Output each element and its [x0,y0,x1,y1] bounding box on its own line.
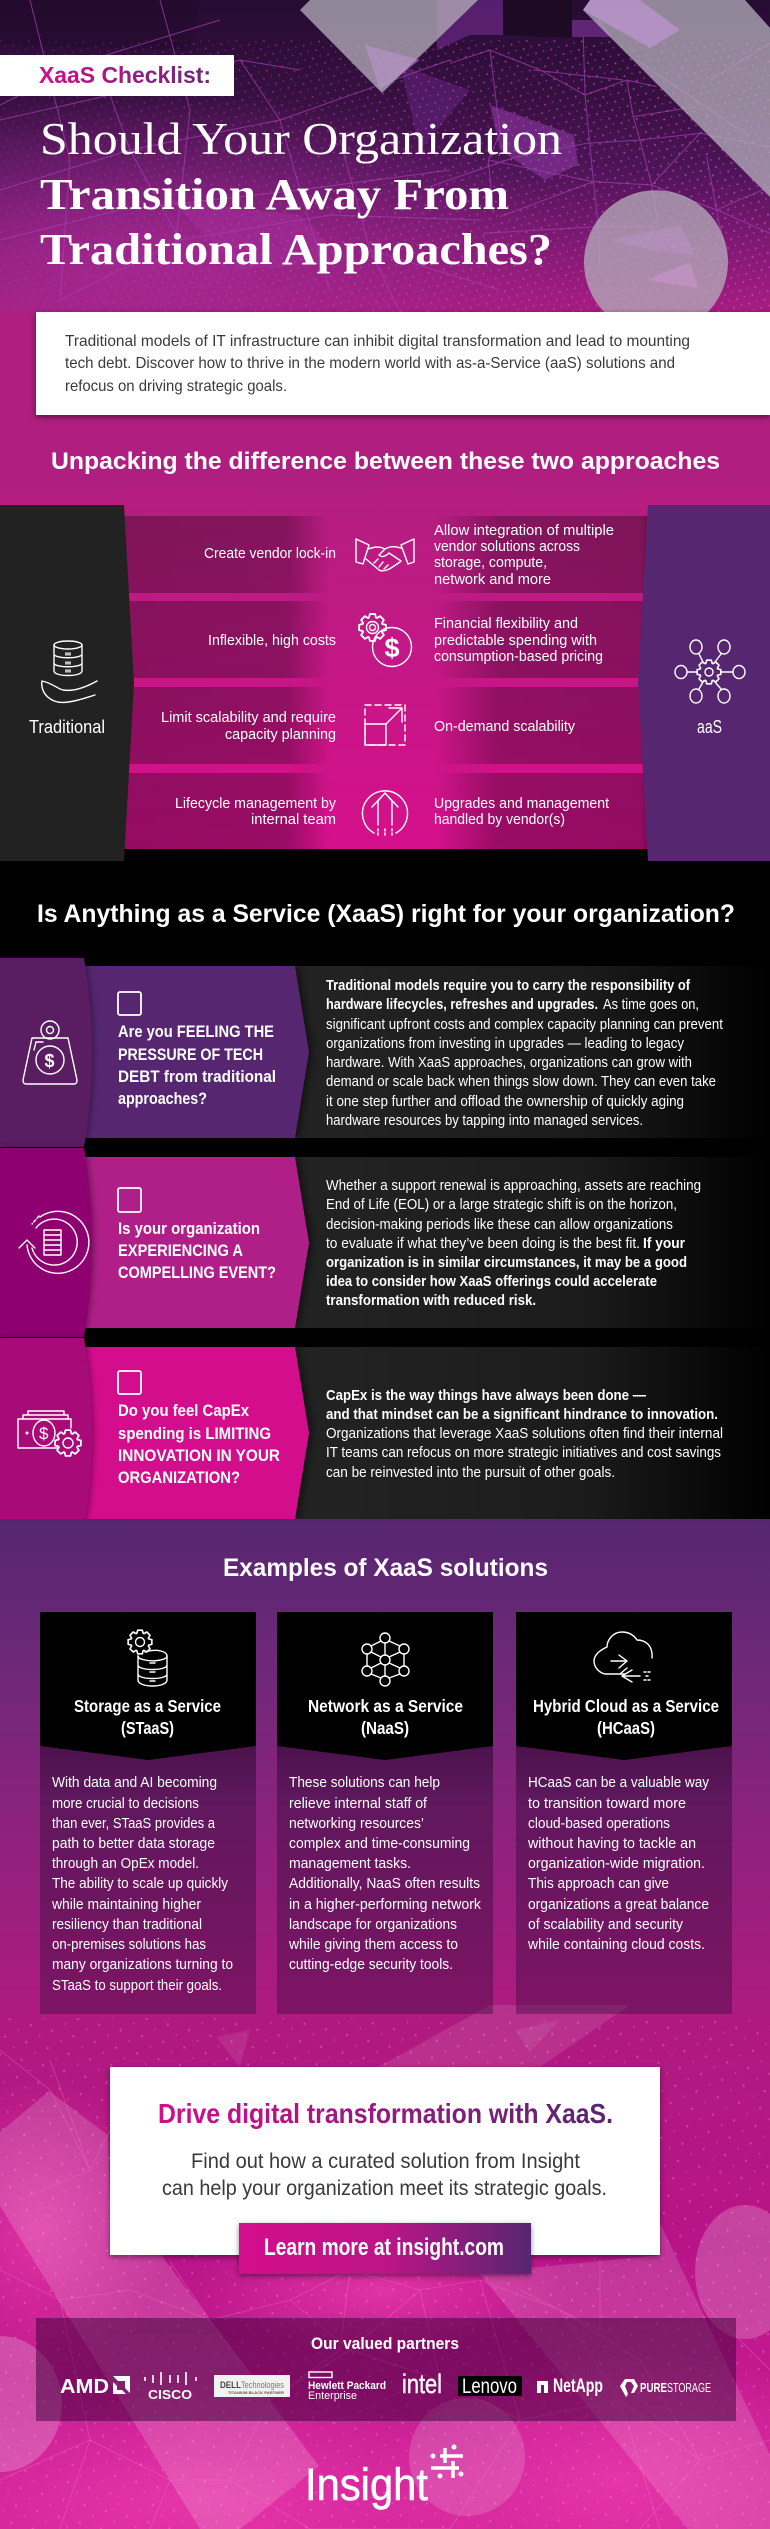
card text: With data and AI becoming [52,1774,217,1791]
heading: unpacking the difference: Unpacking the difference between these two approaches [51,448,720,475]
question: INNOVATION IN YOUR [118,1446,280,1465]
logo: Hewlett Packard Enterprise: Hewlett Packard [308,2380,386,2392]
body text: idea to consider how XaaS offerings could accelerate [326,1273,657,1290]
logo: AMD [60,2376,130,2398]
checkbox [118,992,141,1015]
icon: gear and database [128,1630,167,1686]
body text: If your [643,1235,685,1252]
card text: resiliency than traditional [52,1916,202,1933]
question [118,1219,276,1282]
card text: organization-wide migration. [528,1855,705,1872]
logo: Insight [305,2444,464,2510]
question: PRESSURE OF TECH [118,1045,263,1064]
right column: aaS benefits: Allow integration of multiple [434,523,614,539]
body text [326,1177,701,1309]
title: Traditional Approaches? [40,225,552,274]
body text: Traditional models require you to carry the responsibility of [326,977,691,994]
panel: partners [36,2318,736,2421]
question: ORGANIZATION? [118,1468,240,1487]
panel: comparison background [0,490,770,850]
card text: through an OpEx model. [52,1855,199,1872]
logo: Intel: intel [402,2369,442,2399]
icon: money and gear: $ [39,1424,49,1443]
card text: landscape for organizations [289,1916,457,1933]
card title: (NaaS) [361,1718,409,1738]
card title [533,1696,719,1738]
right column: aaS benefits: On-demand scalability [434,719,576,735]
left column: traditional drawbacks: Lifecycle management by [175,796,337,812]
card text: cloud-based operations [528,1815,670,1832]
icon: handshake [356,539,414,571]
card text: without having to tackle an [527,1835,696,1852]
body text: significant upfront costs and complex capacity planning can prevent [326,1016,724,1033]
icon: gear and dollar coin [359,614,412,666]
card text: relieve internal staff of [289,1795,428,1812]
body text: it one step further and offload the ownership of quickly aging [326,1093,684,1110]
body text: transformation with reduced risk. [326,1292,536,1309]
panel: aaS [638,505,770,861]
card text: Additionally, NaaS often results [289,1875,480,1892]
card text: than ever, STaaS provides a [52,1815,216,1832]
left column: traditional drawbacks: Limit scalability and require [161,710,336,726]
logo: Dell Technologies: DELL [220,2380,241,2390]
question: Do you feel CapEx [118,1401,249,1420]
checkbox [118,1188,141,1212]
icon: scaling box [365,705,405,745]
panel: checklist row 1 [0,958,770,1147]
panel: card STaaS [40,1612,256,2014]
logo: NetApp: NetApp [553,2376,603,2397]
body text: hardware. With XaaS approaches, organizations can grow with [326,1054,692,1071]
card text: STaaS to support their goals. [52,1977,222,1994]
card text: HCaaS can be a valuable way [528,1774,709,1791]
left column: traditional drawbacks [161,546,337,828]
body text: Whether a support renewal is approaching, assets are reaching [326,1177,701,1194]
body text [326,977,724,1129]
question: DEBT from traditional [118,1067,276,1086]
heading: is XaaS right: Is Anything as a Service (XaaS) right for your organization? [37,900,735,928]
card text: more crucial to decisions [52,1795,199,1812]
title: Should Your Organization [40,114,562,164]
panel: traditional [0,505,134,861]
logo: Dell Technologies [214,2375,290,2397]
logo: Pure Storage [620,2379,711,2397]
CTA text [162,2150,607,2200]
body text: organizations from investing in upgrades — leading to legacy [326,1035,684,1052]
question [118,1401,280,1487]
icon: network hub [675,640,745,703]
card text: while maintaining higher [51,1896,201,1913]
left column: traditional drawbacks: Create vendor lock-in [204,546,336,562]
logo: Cisco [145,2372,196,2402]
logo: Lenovo: Lenovo [462,2375,517,2398]
card text: on-premises solutions has [52,1936,206,1953]
panel: examples background [0,1519,770,2019]
right column: aaS benefits: Upgrades and management [434,796,609,812]
icon: hybrid cloud [594,1632,652,1682]
panel: intro text [36,312,770,415]
question: spending is LIMITING [118,1424,271,1443]
icon: debt weight: $ [44,1051,55,1071]
title: Transition Away From [40,170,509,219]
card text: in a higher-performing network [289,1896,481,1913]
body text: organization is in similar circumstances, it may be a good [326,1254,687,1271]
heading: examples of XaaS solutions: Examples of XaaS solutions [223,1554,548,1582]
logo: Pure Storage: STORAGE [667,2380,711,2395]
left column: traditional drawbacks: capacity planning [225,727,336,743]
CTA button [239,2223,531,2274]
card title: (STaaS) [121,1718,174,1738]
body text: demand or scale back when things slow down. They can even take [326,1073,716,1090]
card text: This approach can give [528,1875,669,1892]
icon: refresh cycle [19,1211,89,1273]
tag: XaaS Checklist: XaaS Checklist: [39,62,211,88]
icon: upgrade arrows [362,791,407,835]
CTA text: can help your organization meet its strategic goals. [162,2177,607,2200]
logo: Cisco: CISCO [148,2387,192,2402]
panel: hero header [0,0,770,505]
card title [308,1696,463,1738]
question: COMPELLING EVENT? [118,1263,276,1282]
body text: can be reinvested into the pursuit of other goals. [326,1464,615,1481]
checkbox [118,1371,141,1394]
card title: (HCaaS) [597,1718,655,1738]
right column: aaS benefits: handled by vendor(s) [434,812,565,828]
panel: call to action [110,2067,660,2274]
icon: gear and dollar coin: $ [384,633,400,663]
logo: Dell Technologies: Technologies [241,2380,284,2391]
card title: Network as a Service [308,1696,463,1716]
body text: decision-making periods like these can allow organizations [326,1216,673,1233]
card text [51,1774,233,1994]
card title: Storage as a Service [74,1696,221,1716]
logo: AMD: AMD [60,2376,109,2398]
icon: network mesh [362,1633,409,1686]
CTA text: Find out how a curated solution from Insight [191,2150,580,2173]
card text: networking resources’ [289,1815,424,1832]
card text: These solutions can help [289,1774,440,1791]
right column: aaS benefits: vendor solutions across [434,539,580,555]
title [40,114,562,274]
card text [288,1774,481,1973]
label: aaS: aaS [697,717,722,737]
right column: aaS benefits: Financial flexibility and [434,616,578,632]
card text: while containing cloud costs. [527,1936,705,1953]
right column: aaS benefits: network and more [434,572,551,588]
left column: traditional drawbacks: Inflexible, high costs [208,633,336,649]
panel: card NaaS [277,1612,493,2014]
question: approaches? [118,1089,207,1108]
icon: database on hand [42,641,97,702]
card text: while giving them access to [288,1936,458,1953]
question [118,1022,276,1108]
left column: traditional drawbacks: internal team [251,812,336,828]
right column: aaS benefits: predictable spending with [434,633,597,649]
logo: Hewlett Packard Enterprise [308,2372,386,2402]
panel: checklist row 2 [0,1148,770,1337]
panel: checklist row 3 [0,1338,770,1528]
card text [527,1774,709,1953]
panel: footer background [0,2005,770,2529]
panel: comparison rows [124,516,648,849]
body text: CapEx is the way things have always been done — [326,1387,646,1404]
body text: End of Life (EOL) or a large strategic shift is on the horizon, [326,1196,677,1213]
panel: intro text: refocus on driving strategic goals. [65,378,287,395]
card text: organizations a great balance [528,1896,709,1913]
hero translucent shapes [300,0,770,312]
card title [74,1696,221,1738]
logo: Hewlett Packard Enterprise: Enterprise [308,2390,357,2402]
card text: of scalability and security [528,1916,683,1933]
question: Is your organization [118,1219,260,1238]
CTA button: Learn more at insight.com [264,2234,504,2261]
card text: management tasks. [289,1855,411,1872]
card text: The ability to scale up quickly [52,1875,228,1892]
question: EXPERIENCING A [118,1241,243,1260]
body text: IT teams can refocus on more strategic initiatives and cost savings [326,1444,721,1461]
right column: aaS benefits: storage, compute, [434,555,547,571]
logo: Pure Storage: PURE [640,2380,667,2395]
card title: Hybrid Cloud as a Service [533,1696,719,1716]
card text: many organizations turning to [52,1956,233,1973]
right column: aaS benefits [434,523,614,828]
panel: intro text: Traditional models of IT infrastructure can inhibit digital transformation and lead to mounting [65,333,690,350]
label: traditional: Traditional [29,717,105,737]
body text: to evaluate if what they’ve been doing is the best fit. [326,1235,640,1252]
icon: money and gear [18,1411,81,1456]
card text: complex and time-consuming [289,1835,470,1852]
body text: As time goes on, [603,996,699,1013]
body text: hardware resources by tapping into managed services. [326,1112,643,1129]
logo: Dell Technologies: TITANIUM BLACK PARTNER [228,2391,285,2395]
panel: card HCaaS [516,1612,732,2014]
icon: debt weight [23,1021,77,1084]
body text: Organizations that leverage XaaS solutions often find their internal [326,1425,723,1442]
panel: intro text: tech debt. Discover how to thrive in the modern world with as-a-Service (aaS) solutions and [65,355,675,372]
card text: path to better data storage [52,1835,215,1852]
body text: and that mindset can be a significant hindrance to innovation. [326,1406,718,1423]
logo: Insight: Insight [305,2459,428,2510]
panel: black section background [0,849,770,1520]
card text: cutting-edge security tools. [289,1956,453,1973]
body text: hardware lifecycles, refreshes and upgrades. [326,996,598,1013]
question: Are you FEELING THE [118,1022,274,1041]
logo: NetApp [537,2376,603,2397]
body text [326,1387,723,1481]
right column: aaS benefits: consumption-based pricing [434,649,603,665]
partners heading: Our valued partners [311,2334,459,2353]
CTA heading: Drive digital transformation with XaaS. [158,2098,613,2129]
card text: to transition toward more [528,1795,686,1812]
tag: XaaS Checklist [0,55,234,96]
